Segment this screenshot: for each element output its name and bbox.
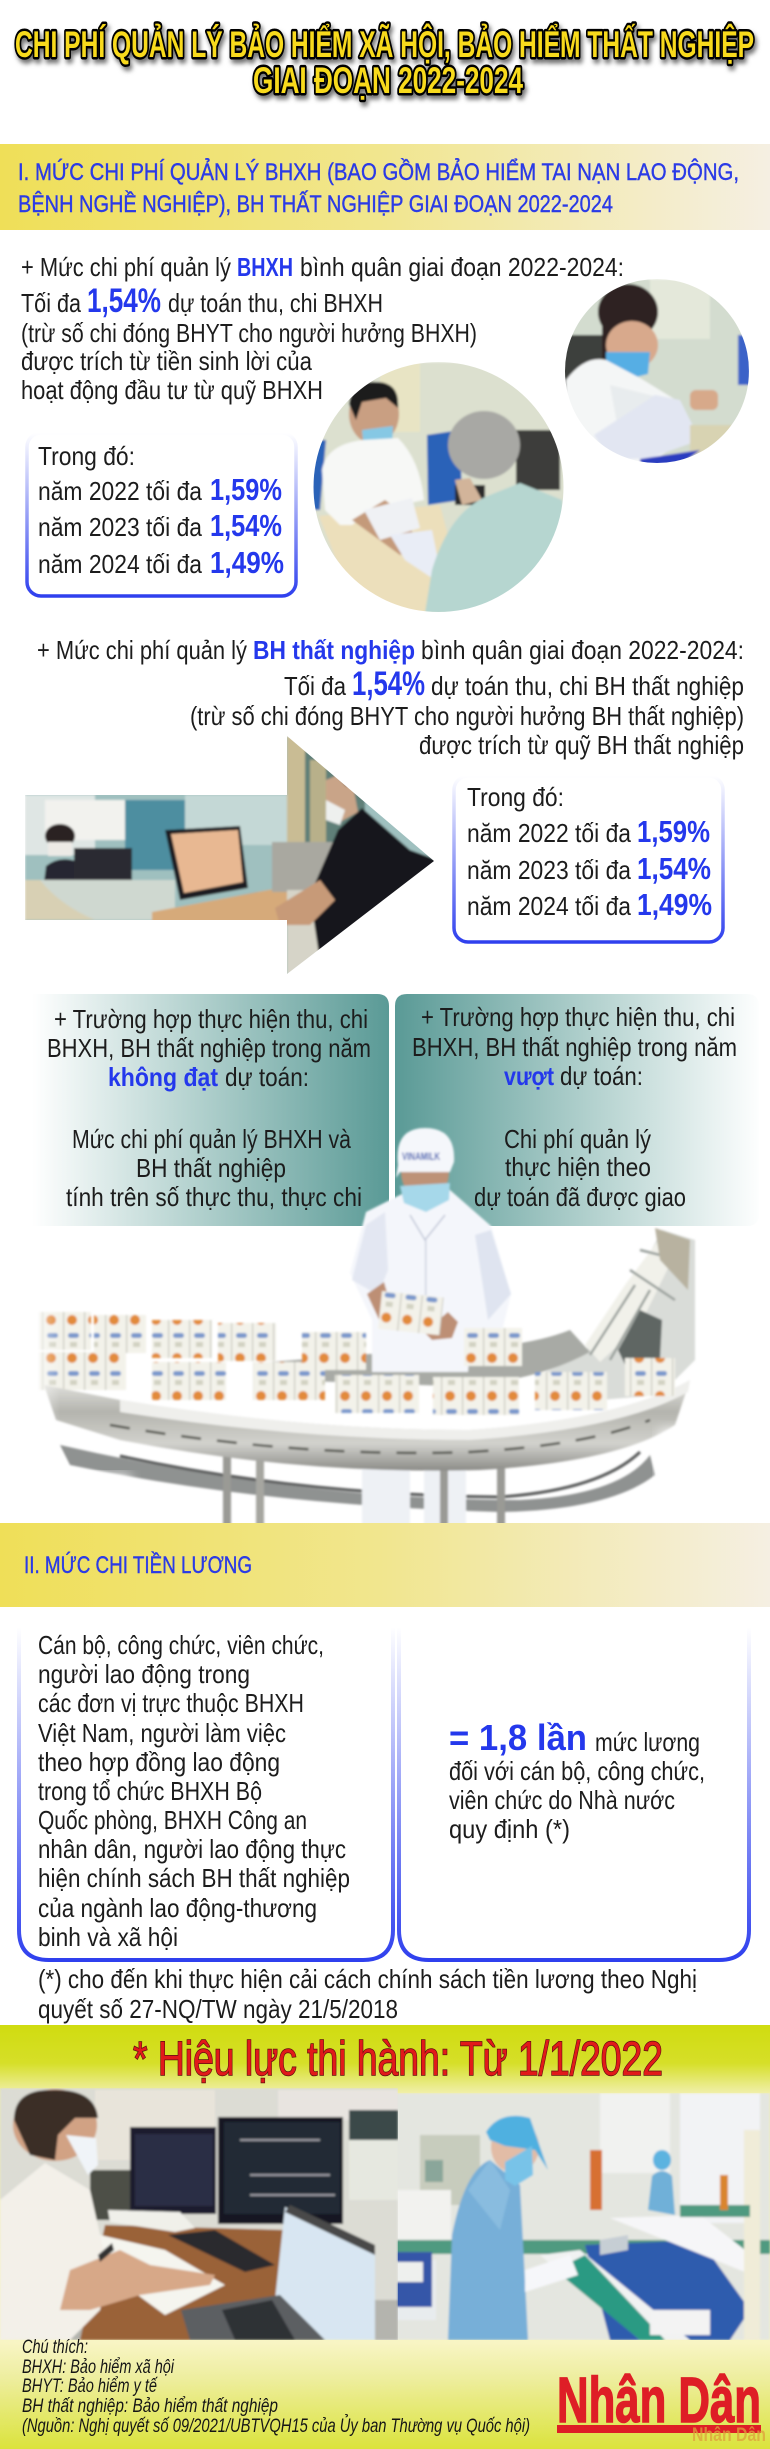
legend and source xyxy=(22,2337,530,2437)
panel: budget not reached: Mức chi phí quản lý BHXH và xyxy=(72,1124,351,1154)
callout: yearly caps for unemployment insurance: 1,59% xyxy=(637,814,710,849)
box: eligible staff: binh và xã hội xyxy=(38,1922,178,1952)
section I heading xyxy=(18,157,739,218)
box: eligible staff: Việt Nam, người làm việc xyxy=(38,1718,286,1748)
panel: budget exceeded: vượt xyxy=(504,1061,554,1091)
text block: BHXH average: BHXH xyxy=(237,252,293,282)
box: eligible staff: hiện chính sách BH thất nghiệp xyxy=(38,1863,350,1893)
callout: yearly caps for BHXH: 1,54% xyxy=(210,508,282,543)
panel: budget exceeded: dự toán đã được giao xyxy=(474,1182,686,1212)
panel: budget not reached: dự toán: xyxy=(225,1062,309,1092)
box: salary multiplier: mức lương xyxy=(595,1727,700,1757)
legend and source: BHYT: Bảo hiểm y tế xyxy=(22,2376,158,2397)
title xyxy=(15,23,754,101)
box: salary multiplier: = 1,8 lần xyxy=(449,1717,587,1758)
callout: yearly caps for BHXH: 1,59% xyxy=(210,472,282,507)
panel: budget exceeded xyxy=(395,994,759,1226)
text block: unemployment insurance average: 1,54% xyxy=(352,665,425,703)
section band I xyxy=(0,144,770,230)
callout: yearly caps for BHXH: Trong đó: xyxy=(38,441,135,471)
text block: unemployment insurance average: + Mức chi phí quản lý xyxy=(37,635,247,665)
text block: BHXH average: (trừ số chi đóng BHYT cho người hưởng BHXH) xyxy=(21,318,477,348)
box: eligible staff: trong tổ chức BHXH Bộ xyxy=(38,1776,262,1806)
text block: BHXH average: 1,54% xyxy=(87,282,161,320)
held milk packs xyxy=(378,1291,444,1335)
callout: yearly caps for unemployment insurance xyxy=(454,776,723,942)
callout: yearly caps for BHXH xyxy=(27,433,296,596)
panel: budget not reached xyxy=(32,994,389,1226)
box: salary multiplier: quy định (*) xyxy=(449,1814,570,1844)
edge fades xyxy=(40,1312,56,1412)
legend and source: Chú thích: xyxy=(22,2337,88,2358)
photo: small circle, officer reading papers xyxy=(560,279,750,470)
legend and source: BHXH: Bảo hiểm xã hội xyxy=(22,2357,175,2378)
panel: budget exceeded: thực hiện theo xyxy=(505,1152,651,1182)
section II heading: II. MỨC CHI TIỀN LƯƠNG xyxy=(24,1551,252,1579)
legend and source: BH thất nghiệp: Bảo hiểm thất nghiệp xyxy=(22,2396,278,2417)
callout: yearly caps for BHXH: năm 2023 tối đa xyxy=(38,512,202,542)
text block: unemployment insurance average: BH thất nghiệp xyxy=(253,635,415,665)
callout: yearly caps for BHXH: 1,49% xyxy=(210,545,284,580)
box: eligible staff: các đơn vị trực thuộc BHXH xyxy=(38,1688,304,1718)
text block: BHXH average: Tối đa xyxy=(21,288,81,318)
footnote: quyết số 27-NQ/TW ngày 21/5/2018 xyxy=(38,1994,398,2024)
front row of milk cartons xyxy=(253,1358,675,1415)
text block: BHXH average: + Mức chi phí quản lý xyxy=(21,252,231,282)
box: salary multiplier xyxy=(399,1627,749,1960)
footer panel xyxy=(0,2025,770,2449)
panel: budget not reached: tính trên số thực thu, thực chi xyxy=(66,1182,362,1212)
text block: BHXH average: bình quân giai đoạn 2022-2024: xyxy=(300,252,624,282)
title: GIAI ĐOẠN 2022-2024 xyxy=(253,60,523,101)
footnote xyxy=(38,1964,697,2024)
callout: yearly caps for unemployment insurance: năm 2023 tối đa xyxy=(467,855,631,885)
inner curved conveyor xyxy=(270,1330,590,1386)
panel: budget exceeded: dự toán: xyxy=(560,1061,643,1091)
section I heading: BỆNH NGHỀ NGHIỆP), BH THẤT NGHIỆP GIAI ĐOẠN 2022-2024 xyxy=(18,190,613,218)
photo: factory worker xyxy=(376,2093,770,2340)
panel: budget not reached: BH thất nghiệp xyxy=(136,1153,286,1183)
box: eligible staff: của ngành lao động-thương xyxy=(38,1893,317,1923)
back rows of milk cartons xyxy=(39,1312,522,1400)
text block: BHXH average: dự toán thu, chi BHXH xyxy=(168,288,383,318)
text block: BHXH average: được trích từ tiền sinh lời của xyxy=(21,346,312,376)
callout: yearly caps for BHXH: năm 2022 tối đa xyxy=(38,476,202,506)
box: eligible staff xyxy=(19,1627,393,1960)
photo: large circle, officer with elderly man xyxy=(312,362,570,620)
box: salary multiplier: đối với cán bộ, công chức, xyxy=(449,1756,705,1786)
panel: budget exceeded: Chi phí quản lý xyxy=(504,1124,651,1154)
legend and source: (Nguồn: Nghị quyết số 09/2021/UBTVQH15 của Ủy ban Thường vụ Quốc hội) xyxy=(22,2415,530,2437)
section band II xyxy=(0,1523,770,1607)
callout: yearly caps for unemployment insurance: năm 2024 tối đa xyxy=(467,891,631,921)
text block: BHXH average xyxy=(21,252,624,405)
arrow photo: factory operators at computers xyxy=(25,736,438,980)
photo: milk production line xyxy=(20,1128,695,1530)
photo: engineer at control monitors xyxy=(0,2088,398,2340)
panel: budget not reached: BHXH, BH thất nghiệp trong năm xyxy=(47,1033,371,1063)
worker figure overlapping the panels xyxy=(350,1128,511,1372)
hat label: VINAMILK xyxy=(402,1151,440,1163)
front metal conveyor band xyxy=(44,1380,690,1471)
text block: unemployment insurance average xyxy=(37,635,744,760)
panel: budget not reached: không đạt xyxy=(108,1062,218,1092)
box: eligible staff: theo hợp đồng lao động xyxy=(38,1747,280,1777)
box: eligible staff: Quốc phòng, BHXH Công an xyxy=(38,1805,307,1835)
box: eligible staff: Cán bộ, công chức, viên chức, xyxy=(38,1630,324,1660)
text block: BHXH average: hoạt động đầu tư từ quỹ BHXH xyxy=(21,375,323,405)
box: eligible staff: nhân dân, người lao động thực xyxy=(38,1834,346,1864)
conveyor rising section on the right xyxy=(540,1228,695,1405)
text block: unemployment insurance average: Tối đa xyxy=(284,671,346,701)
callout: yearly caps for BHXH: năm 2024 tối đa xyxy=(38,549,202,579)
panel: budget not reached: + Trường hợp thực hiện thu, chi xyxy=(54,1004,368,1034)
box: eligible staff: người lao động trong xyxy=(38,1659,250,1689)
callout: yearly caps for unemployment insurance: Trong đó: xyxy=(467,782,564,812)
leg rails xyxy=(59,1444,656,1523)
box: salary multiplier: viên chức do Nhà nước xyxy=(449,1785,675,1815)
callout: yearly caps for unemployment insurance: 1,49% xyxy=(637,887,712,922)
callout: yearly caps for unemployment insurance: năm 2022 tối đa xyxy=(467,818,631,848)
callout: yearly caps for unemployment insurance: 1,54% xyxy=(637,851,711,886)
